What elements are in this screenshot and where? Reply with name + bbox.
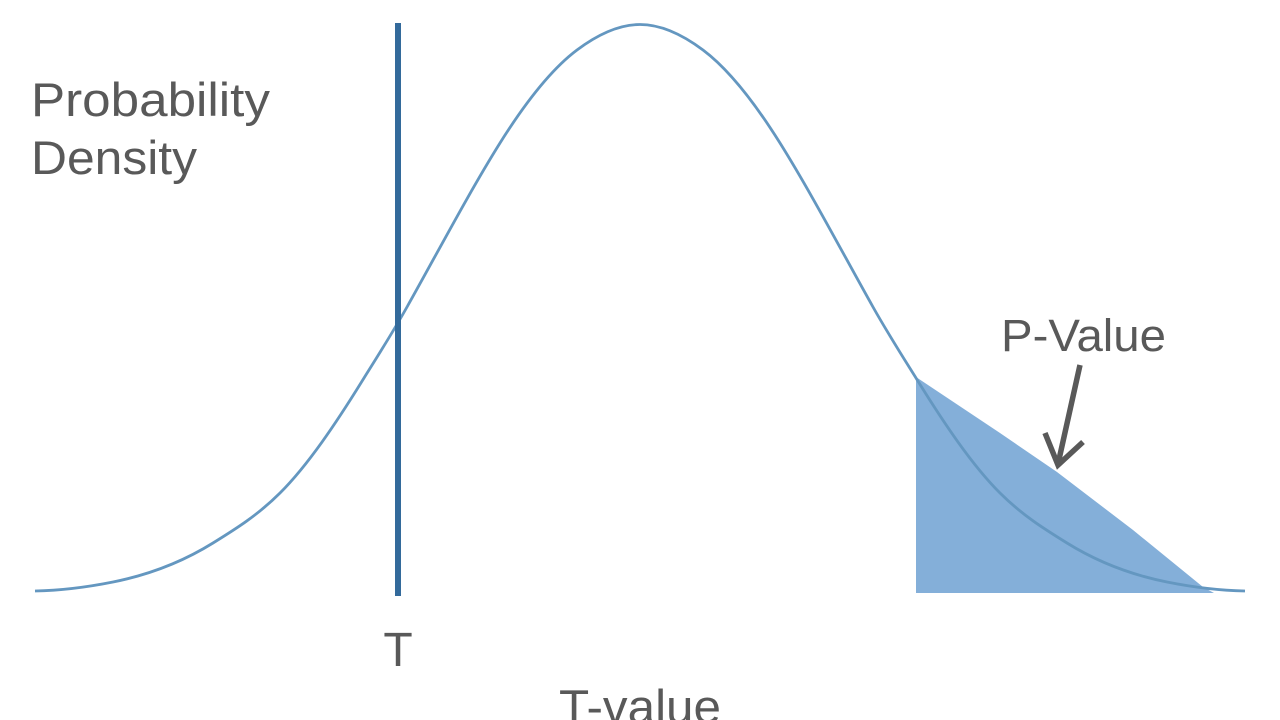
shaded p-value region: [916, 377, 1214, 593]
p-value label: P-Value: [1001, 310, 1166, 361]
density curve: [35, 24, 1245, 591]
arrow to p-value region: [1045, 365, 1083, 465]
y-axis label: Density: [31, 131, 198, 184]
T label: T: [383, 624, 413, 677]
y-axis label: Probability: [31, 73, 271, 126]
T marker line: [395, 23, 401, 596]
